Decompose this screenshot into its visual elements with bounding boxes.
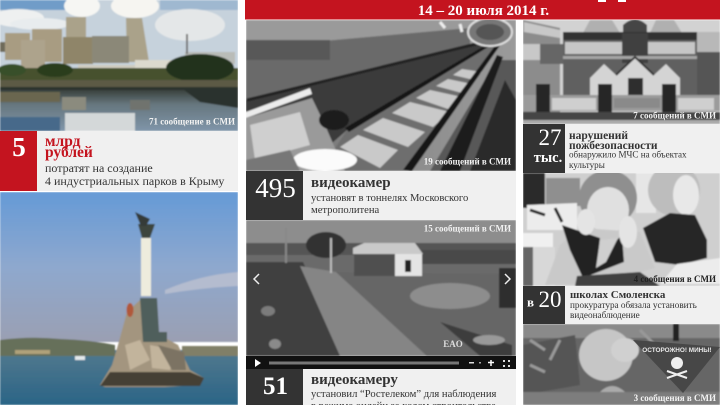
description: обнаружило МЧС на объектах [569,150,687,160]
heading: видеокамер [311,175,391,191]
caption: 7 сообщений в СМИ [633,110,716,120]
header band: date: 14 – 20 июля 2014 г. [418,3,549,19]
icon: play [255,359,261,367]
number box: 27 [538,125,562,150]
number box [246,171,303,220]
fact block: 5 млрд рублей [0,131,238,191]
fact block: 495 видеокамер [246,171,516,220]
caption: 3 сообщения в СМИ [634,393,716,403]
heading: школах Смоленска [570,289,666,301]
heading: пожбезопасности [569,140,658,152]
heading: млрд [45,133,81,150]
description: потратят на создание [45,161,153,175]
description: прокуратура обязала установить [570,300,697,310]
number box [523,286,565,324]
number box: 495 [255,173,296,203]
fact block: 27 тыс. нарушений [523,124,720,173]
photo: monument to sunken ships [0,192,238,405]
fact block: 51 видеокамеру [246,369,516,405]
number box: 5 [12,132,26,162]
photo: mine warning sign [523,324,720,405]
photo: Tretyakov gallery [523,20,720,124]
description: видеонаблюдение [570,310,640,320]
heading: нарушений [569,130,628,142]
progress bar [269,362,459,364]
heading: видеокамеру [311,372,398,388]
description: установил “Ростелеком” для наблюдения [311,389,496,400]
description: метрополитена [311,205,380,216]
photo: school children [523,164,720,286]
number box: тыс. [534,150,562,166]
caption: 15 сообщений в СМИ [424,224,511,234]
video frame: construction site [246,220,516,356]
icon: volume up [488,360,494,366]
number box: в [527,294,534,310]
number box [523,124,565,173]
number box [246,369,303,405]
number box: 20 [538,287,562,312]
fact block: в 20 школах [523,286,720,324]
icon: mine sign [633,340,720,393]
caption: 4 сообщения в СМИ [634,274,716,284]
description: установят в тоннелях Московского [311,193,468,204]
arrow: previous [254,274,259,284]
arrow: next [505,274,510,284]
heading: рублей [45,144,93,161]
icon: mine sign: ОСТОРОЖНО! МИНЫ! [642,347,712,354]
photo: power plant [0,0,238,131]
video controls [246,356,516,369]
header band: date [245,0,720,20]
description: культуры [569,160,605,170]
number box [0,131,37,191]
caption: 19 сообщений в СМИ [424,156,511,166]
icon: fullscreen [503,360,510,367]
caption: 71 сообщение в СМИ [149,116,235,126]
number box: 51 [263,373,288,400]
description: 4 индустриальных парков в Крыму [45,174,224,188]
photo: metro tunnel [246,18,516,171]
watermark: EAO [443,339,463,349]
